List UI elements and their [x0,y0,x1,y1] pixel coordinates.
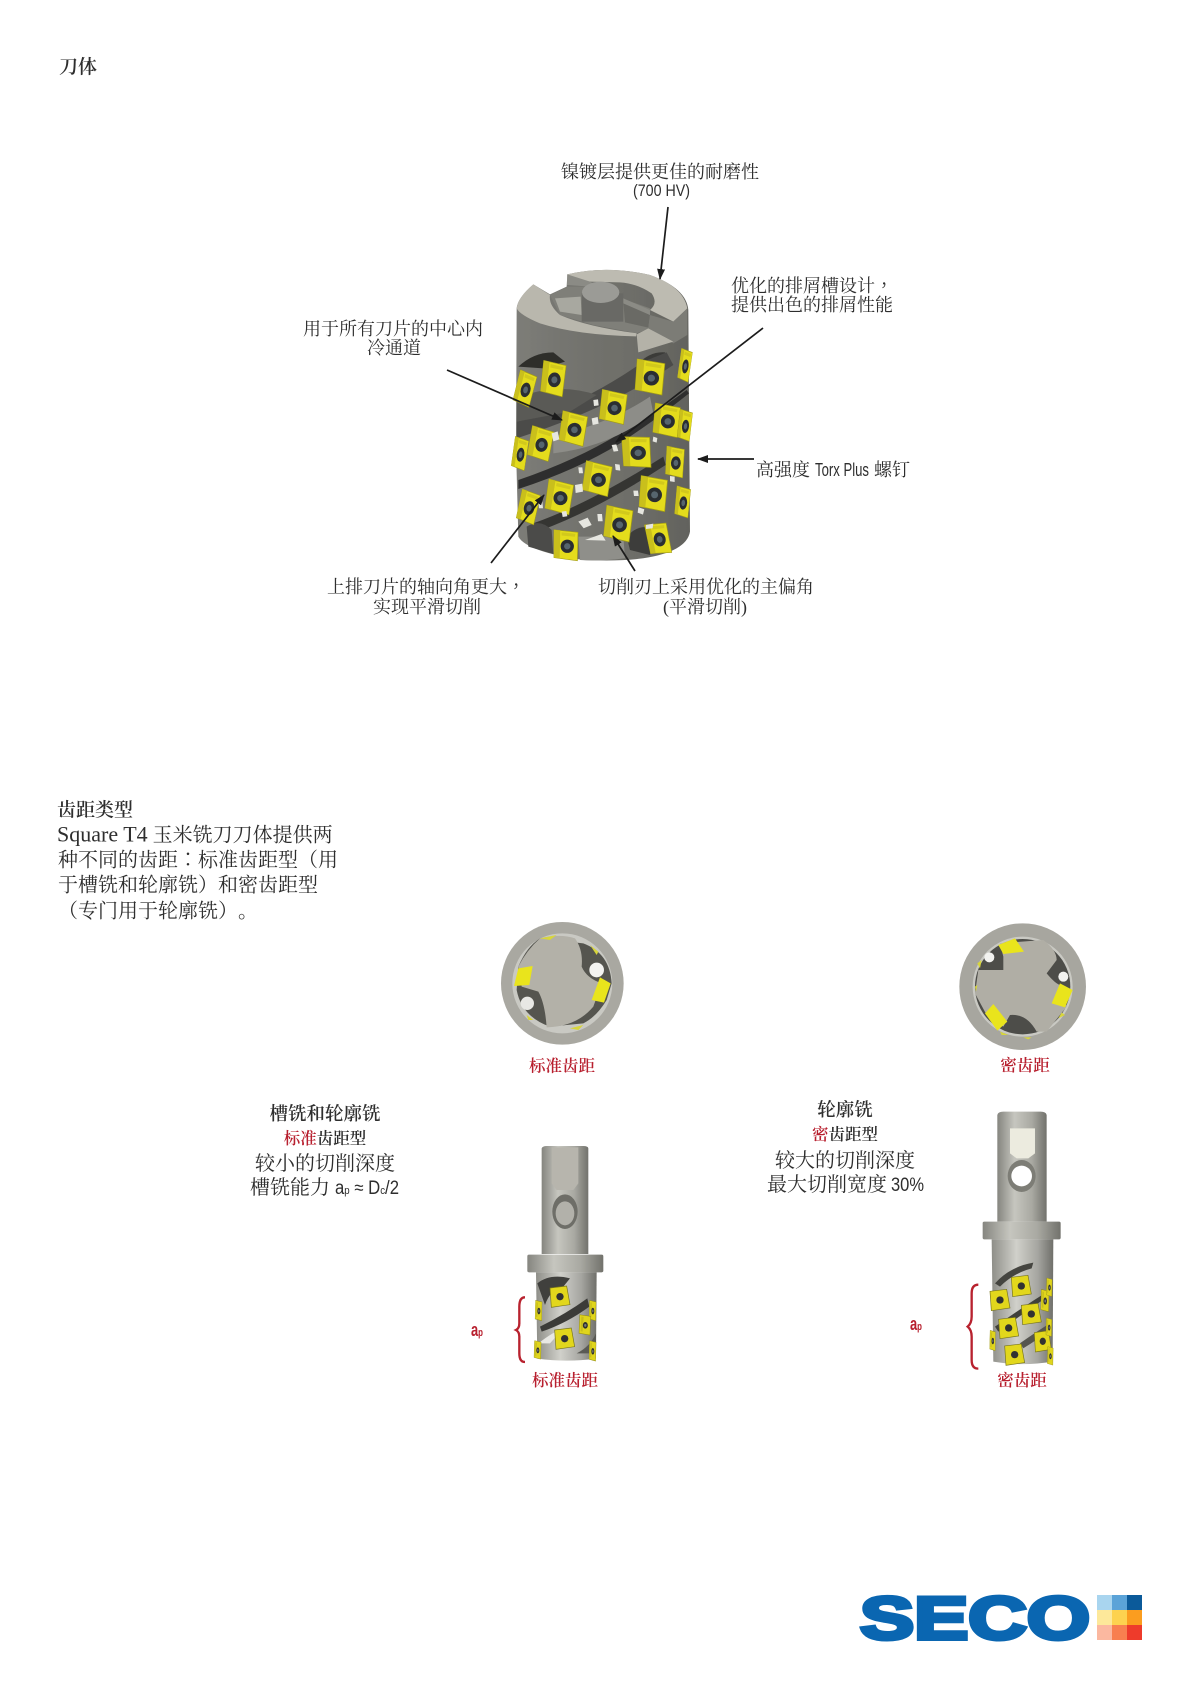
inserts on standard tool [534,1286,596,1361]
label: chip flute design: 提供出色的排屑性能 [731,295,893,315]
label: central coolant channels: 用于所有刀片的中心内 [303,319,483,339]
caption: close pitch: 密齿距 [1000,1056,1050,1075]
caption: close pitch tool: 密齿距 [997,1371,1047,1390]
text block: pitch description [57,822,338,922]
label: Torx Plus screw: Torx Plus [815,460,869,480]
label: nickel coating [561,162,759,200]
logo: SECO [860,1585,1142,1652]
inserts on cutter [511,348,693,561]
arrow: nickel coating [660,207,668,279]
image: standard pitch end view [501,922,624,1045]
text block: profiling: 轮廓铣 [817,1100,873,1121]
label: upper row axial rake: 实现平滑切削 [373,597,481,617]
brace: cutting depth [968,1285,978,1369]
label: optimized lead angle: 切削刃上采用优化的主偏角 [598,577,814,597]
arrow: central coolant [447,370,562,420]
label: central coolant channels: 冷通道 [367,338,421,358]
image: close pitch tool [968,1112,1061,1369]
image: close pitch end view [959,923,1086,1050]
text block: pitch description: Square T4 玉米铣刀刀体提供两 [57,822,333,846]
text block: profiling: 最大切削宽度 [767,1173,887,1196]
text block: profiling [767,1100,924,1196]
text block: slotting and profiling [250,1104,399,1199]
label: Torx Plus screw: 螺钉 [874,460,910,480]
label: optimized lead angle: (平滑切削) [663,597,747,618]
image: standard pitch tool [516,1146,603,1362]
text block: pitch description: 种不同的齿距：标准齿距型（用 [58,844,338,872]
label: central coolant channels [303,319,483,358]
label: nickel coating: 镍镀层提供更佳的耐磨性 [561,162,759,182]
label: chip flute design: 优化的排屑槽设计， [731,272,893,298]
arrow: lead angle [613,536,635,571]
brace: cutting depth [516,1297,525,1362]
inserts on close pitch tool [990,1275,1053,1365]
title: 刀体: 刀体 [59,56,97,78]
arrow: chip flute [616,328,763,442]
label: upper row axial rake: 上排刀片的轴向角更大， [327,573,525,599]
arrow: Torx Plus screw [698,458,754,460]
text block: pitch description: （专门用于轮廓铣）。 [58,900,258,922]
label: upper row axial rake [327,573,525,617]
text block: pitch description: 于槽铣和轮廓铣）和密齿距型 [58,874,318,896]
heading: pitch types: 齿距类型 [57,799,133,821]
text block: profiling: 30% [891,1175,924,1196]
illustration: milling cutter body [511,270,693,561]
caption: standard pitch tool: 标准齿距 [532,1371,598,1390]
label: Torx Plus screw [756,460,910,480]
text block: slotting and profiling: 槽铣能力 [250,1176,330,1199]
label: Torx Plus screw: 高强度 [756,460,810,480]
text block: profiling: 密齿距型 [812,1125,878,1144]
arrow: axial rake [491,495,544,563]
label: nickel coating: (700 HV) [633,181,690,200]
text block: slotting and profiling: 较小的切削深度 [255,1152,395,1175]
label: ap close: ap [910,1314,922,1334]
text block: slotting and profiling: 标准齿距型 [284,1129,366,1148]
text block: slotting and profiling: 槽铣和轮廓铣 [269,1104,381,1125]
logo: SECO: SECO [860,1585,1090,1652]
text block: profiling: 较大的切削深度 [775,1149,915,1172]
label: ap standard: ap [471,1320,483,1340]
caption: standard pitch: 标准齿距 [529,1056,596,1076]
label: optimized lead angle [598,577,814,618]
label: chip flute design [731,272,893,315]
text block: slotting and profiling: ap ≈ Dc/2 [335,1178,399,1199]
